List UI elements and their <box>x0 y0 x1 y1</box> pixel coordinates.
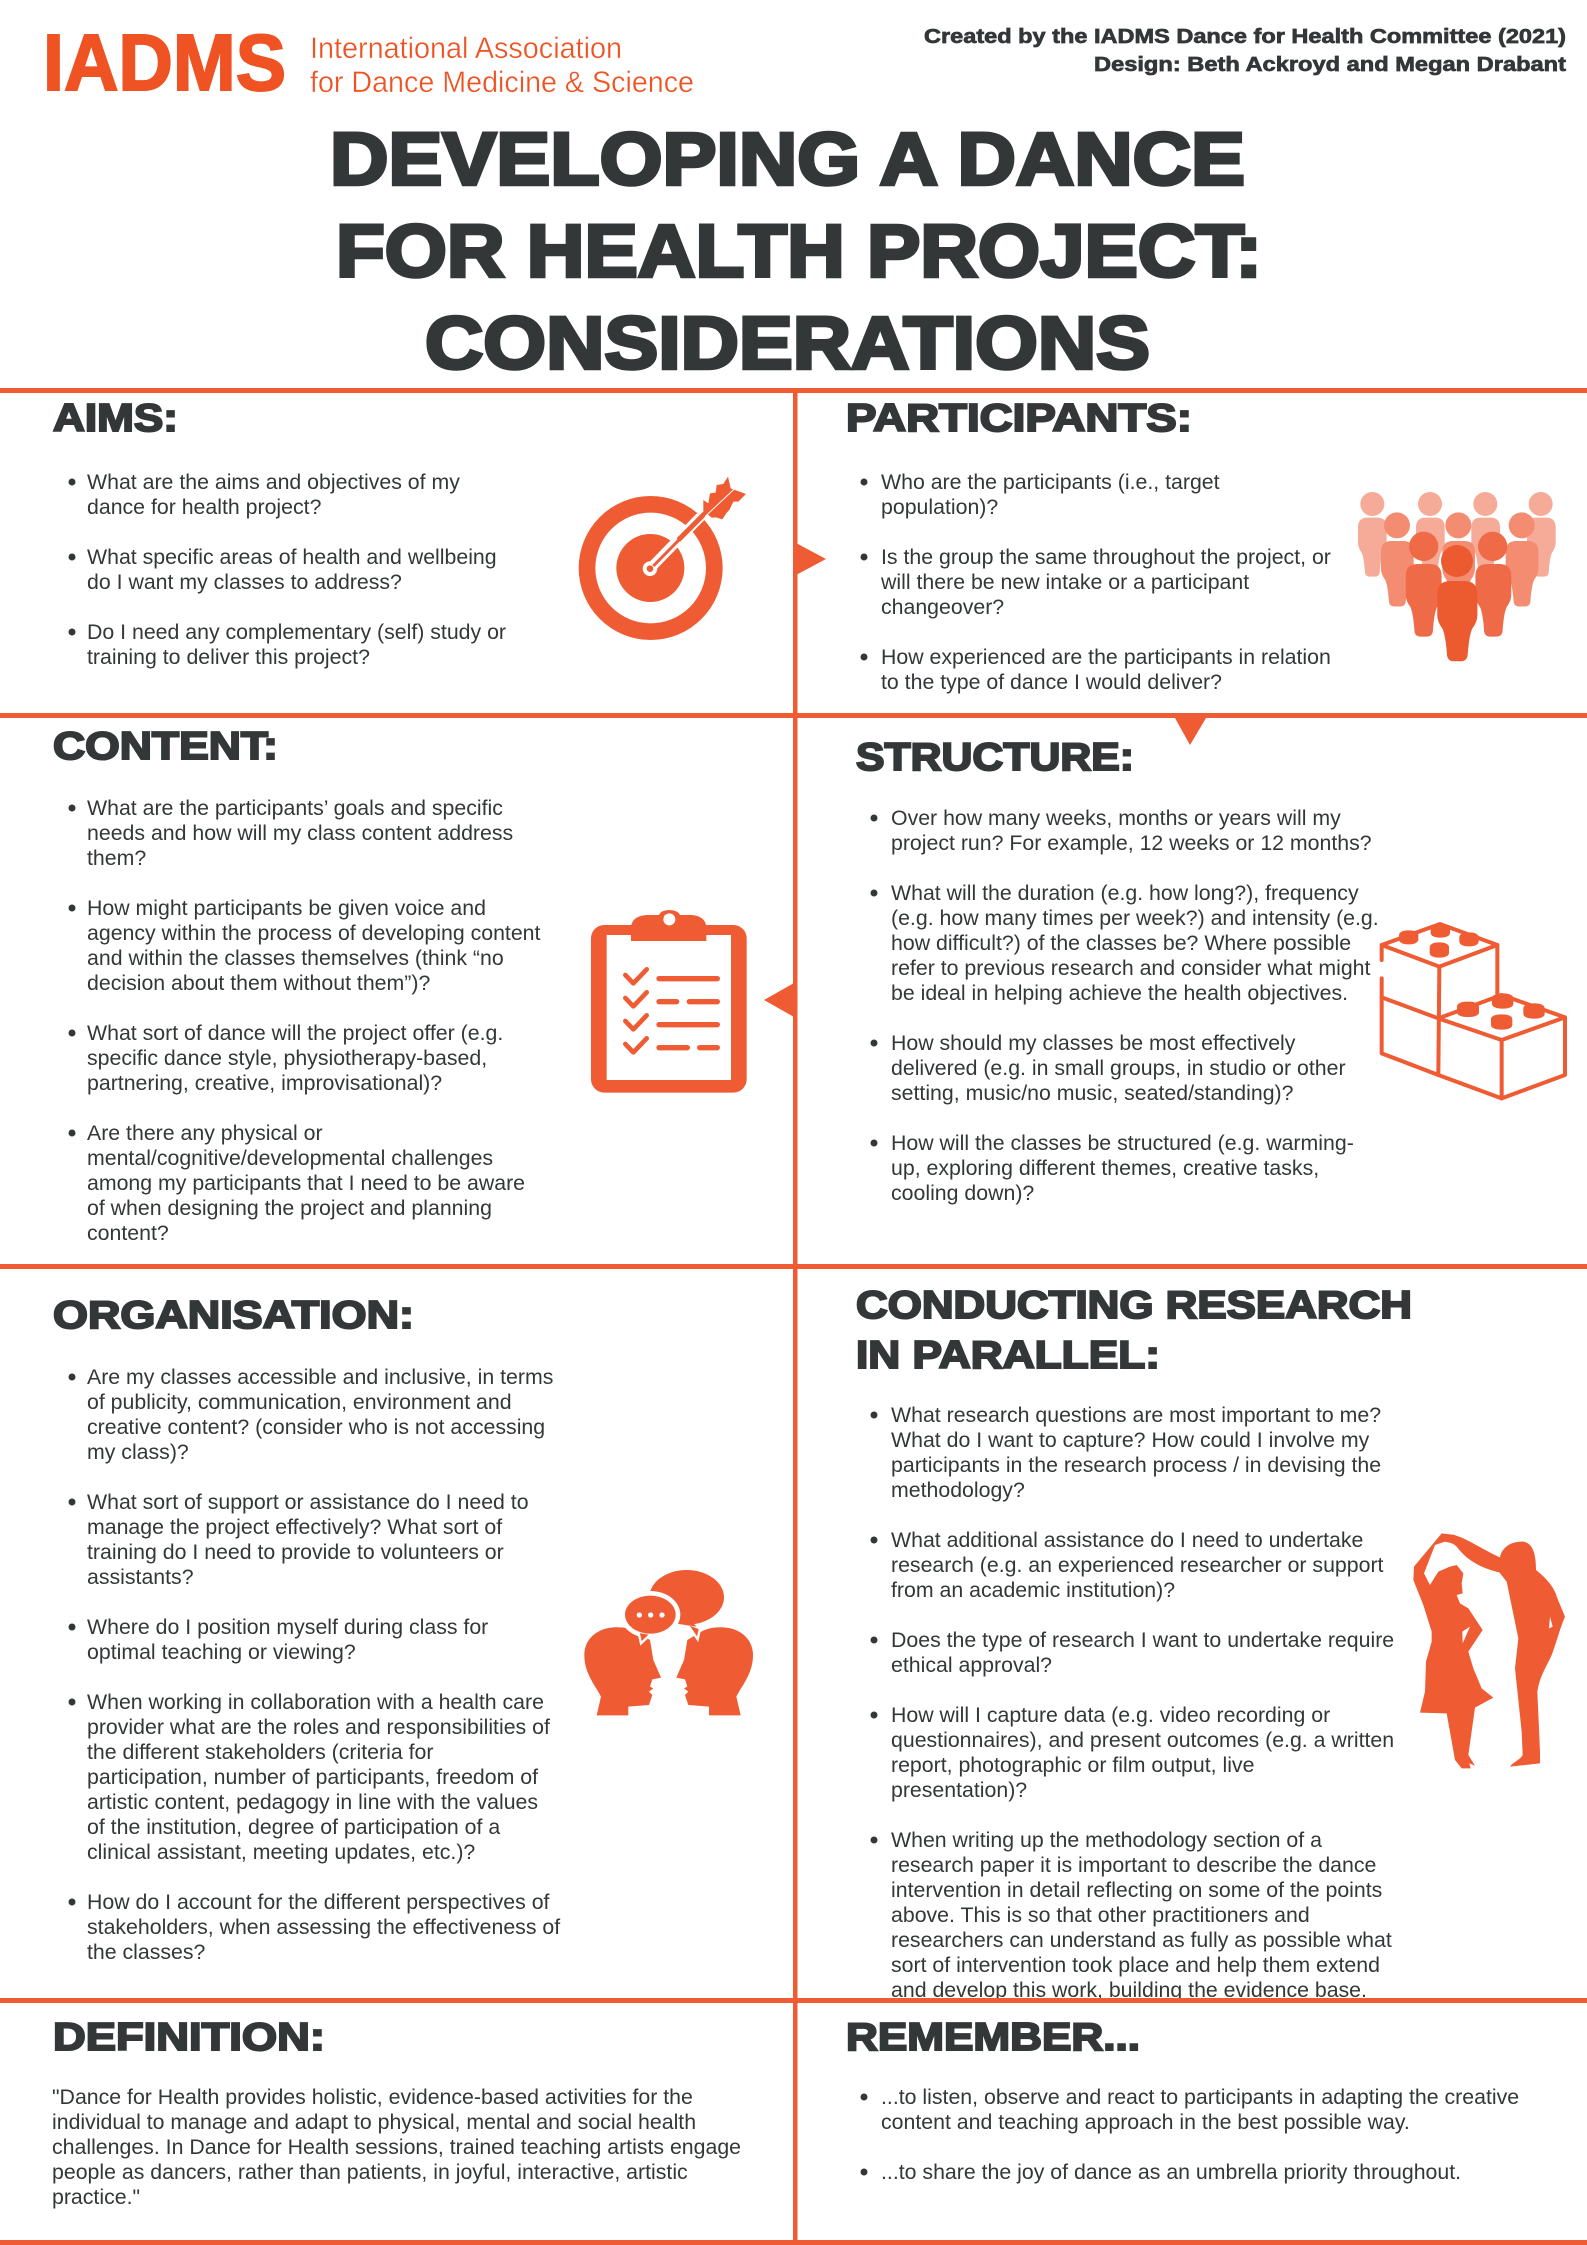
bullet list: organisation: of the institution, degree of participation of a <box>87 1815 500 1839</box>
text block: definition quote: people as dancers, rather than patients, in joyful, interactive, artistic <box>52 2160 688 2184</box>
panel: structure <box>856 736 1565 1205</box>
bullet list: research: research paper it is important to describe the dance <box>891 1853 1376 1877</box>
heading: aims: AIMS: <box>53 397 178 440</box>
bullet list: research: researchers can understand as fully as possible what <box>891 1928 1392 1952</box>
arrow: aims to participants <box>796 543 826 575</box>
heading: participants: PARTICIPANTS: <box>846 397 1192 440</box>
bullet list: participants: Who are the participants (i.e., target <box>881 470 1220 494</box>
bullet list: participants: will there be new intake or a participant <box>880 570 1249 594</box>
bullet list: content: Are there any physical or <box>87 1121 323 1145</box>
panel: participants <box>846 397 1556 694</box>
bullet list: content: What sort of dance will the project offer (e.g. <box>87 1021 503 1045</box>
bullet list: content <box>68 796 541 1245</box>
bullet list: organisation: provider what are the roles and responsibilities of <box>87 1715 550 1739</box>
bullet list: aims: What are the aims and objectives of my <box>87 470 460 494</box>
icon: clipboard checklist <box>591 910 747 1093</box>
bullet list: participants: changeover? <box>881 595 1004 619</box>
bullet list: research: What do I want to capture? How could I involve my <box>891 1428 1370 1452</box>
icon: building blocks <box>1382 924 1565 1098</box>
bullet list: structure: What will the duration (e.g. how long?), frequency <box>891 881 1359 905</box>
bullet list: research <box>870 1403 1394 2002</box>
bullet list: content: and within the classes themselves (think “no <box>87 946 504 970</box>
bullet list: research: sort of intervention took place and help them extend <box>891 1953 1380 1977</box>
bullet list: structure: (e.g. how many times per week?) and intensity (e.g. <box>891 906 1379 930</box>
bullet list: research: intervention in detail reflecting on some of the points <box>891 1878 1382 1902</box>
bullet list: structure: Over how many weeks, months or years will my <box>891 806 1341 830</box>
bullet list: organisation: When working in collaboration with a health care <box>87 1690 544 1714</box>
bullet list: research: How will I capture data (e.g. video recording or <box>891 1703 1330 1727</box>
bullet list: research: ethical approval? <box>891 1653 1052 1677</box>
logo: IADMS: for Dance Medicine & Science <box>310 66 694 99</box>
bullet list: research: What research questions are most important to me? <box>891 1403 1381 1427</box>
arrow: participants to structure <box>1175 718 1206 745</box>
bullet list: structure <box>870 806 1379 1205</box>
bullet list: remember: content and teaching approach in the best possible way. <box>881 2110 1410 2134</box>
credits <box>924 26 1566 76</box>
bullet list: organisation: creative content? (consider who is not accessing <box>87 1415 545 1439</box>
bullet list: research: from an academic institution)? <box>891 1578 1175 1602</box>
bullet list: organisation: optimal teaching or viewing? <box>87 1640 356 1664</box>
logo: IADMS: International Association <box>310 32 622 65</box>
bullet list: content: them? <box>87 846 146 870</box>
bullet list: structure: setting, music/no music, seated/standing)? <box>891 1081 1294 1105</box>
heading: structure: STRUCTURE: <box>856 736 1134 779</box>
heading: content: CONTENT: <box>53 725 278 768</box>
bullet list: research: Does the type of research I want to undertake require <box>891 1628 1394 1652</box>
bullet list: remember: ...to share the joy of dance as an umbrella priority throughout. <box>881 2160 1461 2184</box>
bullet list: aims: dance for health project? <box>87 495 322 519</box>
bullet list: content: partnering, creative, improvisational)? <box>87 1071 442 1095</box>
bullet list: participants <box>860 470 1331 694</box>
bullet list: organisation: Are my classes accessible and inclusive, in terms <box>87 1365 553 1389</box>
bullet list: research: methodology? <box>891 1478 1025 1502</box>
text block: definition quote: individual to manage and adapt to physical, mental and social health <box>52 2110 696 2134</box>
panel: definition <box>52 2016 741 2209</box>
credits: Design: Beth Ackroyd and Megan Drabant <box>1094 54 1566 76</box>
bullet list: content: needs and how will my class content address <box>87 821 513 845</box>
bullet list: research: questionnaires), and present outcomes (e.g. a written <box>891 1728 1394 1752</box>
heading: conducting research in parallel <box>856 1284 1412 1377</box>
icon: target with arrow <box>579 477 746 640</box>
bullet list: structure: how difficult?) of the classes be? Where possible <box>891 931 1351 955</box>
bullet list: content: among my participants that I need to be aware <box>87 1171 525 1195</box>
title: DEVELOPING A DANCE <box>330 118 1245 200</box>
bullet list: content: of when designing the project and planning <box>87 1196 492 1220</box>
bullet list: research: presentation)? <box>891 1778 1027 1802</box>
icon: dancing couple <box>1413 1533 1565 1768</box>
bullet list: content: agency within the process of developing content <box>87 921 541 945</box>
panel: organisation <box>53 1294 753 1964</box>
bullet list: structure: cooling down)? <box>891 1181 1034 1205</box>
bullet list: organisation: manage the project effectively? What sort of <box>87 1515 502 1539</box>
text block: definition quote: "Dance for Health provides holistic, evidence-based activities for the <box>52 2085 693 2109</box>
bullet list: aims <box>68 470 506 669</box>
bullet list: research: participants in the research process / in devising the <box>891 1453 1381 1477</box>
bullet list: content: specific dance style, physiotherapy-based, <box>87 1046 487 1070</box>
title <box>330 118 1262 384</box>
bullet list: research: report, photographic or film output, live <box>891 1753 1254 1777</box>
logo: IADMS: IADMS <box>43 18 286 107</box>
bullet list: organisation: training do I need to provide to volunteers or <box>87 1540 504 1564</box>
bullet list: structure: How should my classes be most effectively <box>891 1031 1296 1055</box>
bullet list: research: What additional assistance do I need to undertake <box>891 1528 1363 1552</box>
bullet list: organisation: of publicity, communication, environment and <box>87 1390 512 1414</box>
bullet list: organisation <box>68 1365 560 1964</box>
bullet list: content: content? <box>87 1221 169 1245</box>
bullet list: remember <box>860 2085 1519 2184</box>
bullet list: aims: Do I need any complementary (self) study or <box>87 620 506 644</box>
title: FOR HEALTH PROJECT: <box>336 210 1262 292</box>
bullet list: organisation: Where do I position myself during class for <box>87 1615 488 1639</box>
bullet list: organisation: assistants? <box>87 1565 194 1589</box>
bullet list: participants: How experienced are the participants in relation <box>881 645 1331 669</box>
bullet list: structure: project run? For example, 12 weeks or 12 months? <box>891 831 1372 855</box>
bullet list: structure: How will the classes be structured (e.g. warming- <box>891 1131 1354 1155</box>
bullet list: aims: training to deliver this project? <box>87 645 370 669</box>
bullet list: research: and develop this work, building the evidence base. <box>891 1978 1367 2002</box>
bullet list: aims: do I want my classes to address? <box>87 570 402 594</box>
bullet list: organisation: the classes? <box>87 1940 206 1964</box>
heading: organisation: ORGANISATION: <box>53 1294 414 1337</box>
bullet list: research: above. This is so that other practitioners and <box>891 1903 1310 1927</box>
bullet list: research: When writing up the methodology section of a <box>891 1828 1322 1852</box>
bullet list: structure: delivered (e.g. in small groups, in studio or other <box>891 1056 1346 1080</box>
bullet list: content: How might participants be given voice and <box>87 896 486 920</box>
bullet list: organisation: What sort of support or assistance do I need to <box>87 1490 529 1514</box>
panel: content <box>53 725 747 1245</box>
bullet list: remember: ...to listen, observe and react to participants in adapting the creative <box>881 2085 1519 2109</box>
heading: conducting research in parallel: IN PARALLEL: <box>856 1334 1160 1377</box>
text block: definition quote: practice." <box>52 2185 140 2209</box>
heading: definition: DEFINITION: <box>53 2016 325 2059</box>
bullet list: structure: be ideal in helping achieve the health objectives. <box>891 981 1348 1005</box>
bullet list: aims: What specific areas of health and wellbeing <box>87 545 497 569</box>
bullet list: organisation: my class)? <box>87 1440 189 1464</box>
bullet list: organisation: the different stakeholders (criteria for <box>87 1740 433 1764</box>
bullet list: organisation: participation, number of participants, freedom of <box>87 1765 538 1789</box>
credits: Created by the IADMS Dance for Health Committee (2021) <box>924 26 1566 48</box>
text block: definition quote: challenges. In Dance for Health sessions, trained teaching artists engage <box>52 2135 741 2159</box>
text block: definition quote <box>52 2085 741 2209</box>
panel: conducting research in parallel <box>856 1284 1565 2002</box>
bullet list: content: decision about them without them”)? <box>87 971 430 995</box>
bullet list: organisation: clinical assistant, meeting updates, etc.)? <box>87 1840 475 1864</box>
icon: two heads with speech bubbles <box>584 1570 753 1715</box>
heading: remember: REMEMBER... <box>846 2016 1140 2059</box>
bullet list: research: research (e.g. an experienced researcher or support <box>891 1553 1384 1577</box>
bullet list: participants: Is the group the same throughout the project, or <box>881 545 1331 569</box>
bullet list: structure: refer to previous research and consider what might <box>891 956 1371 980</box>
bullet list: organisation: artistic content, pedagogy in line with the values <box>87 1790 538 1814</box>
bullet list: participants: to the type of dance I would deliver? <box>881 670 1222 694</box>
bullet list: organisation: How do I account for the different perspectives of <box>87 1890 550 1914</box>
logo: IADMS <box>43 18 694 107</box>
bullet list: content: mental/cognitive/developmental challenges <box>87 1146 493 1170</box>
heading: conducting research in parallel: CONDUCTING RESEARCH <box>856 1284 1412 1327</box>
panel: aims <box>53 397 746 669</box>
bullet list: participants: population)? <box>881 495 998 519</box>
icon: group of people <box>1358 492 1556 661</box>
bullet list: organisation: stakeholders, when assessing the effectiveness of <box>87 1915 560 1939</box>
arrow: content to structure <box>764 983 794 1017</box>
bullet list: structure: up, exploring different themes, creative tasks, <box>891 1156 1319 1180</box>
panel: remember <box>846 2016 1519 2184</box>
bullet list: content: What are the participants’ goals and specific <box>87 796 503 820</box>
title: CONSIDERATIONS <box>425 302 1150 384</box>
